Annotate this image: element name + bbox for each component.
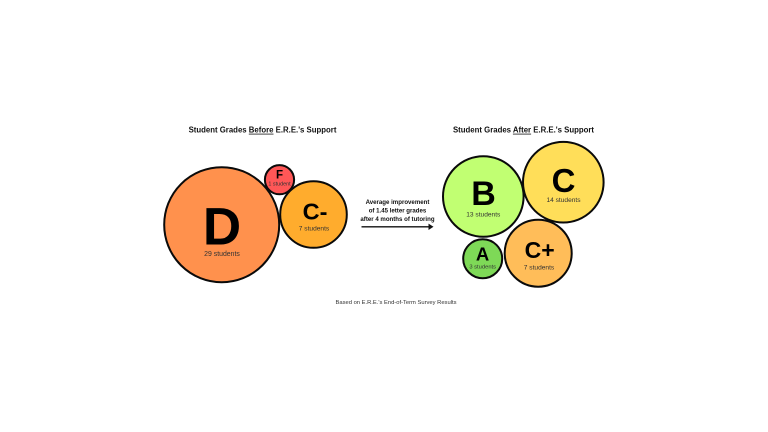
callout: average improvement: after 4 months of tutoring <box>360 216 435 223</box>
panel: grades after support <box>443 142 604 287</box>
bubble: grade D: 29 students <box>204 251 240 258</box>
bubble: grade D <box>164 167 279 282</box>
bubble: grade B: B <box>471 175 496 213</box>
bubble: grade B <box>443 156 524 237</box>
bubble: grade C-: C- <box>303 198 327 224</box>
bubble: grade C+ <box>505 220 572 287</box>
callout: average improvement: of 1.45 letter grades <box>369 208 427 214</box>
bubble: grade D: D <box>203 197 241 256</box>
bubble: grade A: 3 students <box>469 264 496 270</box>
bubble: grade A <box>463 239 502 278</box>
panel: grades before support <box>164 165 347 282</box>
bubble: grade F: F <box>276 170 283 182</box>
bubble: grade C-: 7 students <box>299 226 330 233</box>
bubble: grade F: 1 student <box>268 182 291 188</box>
heading: grades after: Student Grades After E.R.E.'s Support <box>453 126 594 135</box>
footnote: source: Based on E.R.E.'s End-of-Term Survey Results <box>336 300 457 306</box>
bubble: grade C: C <box>552 162 575 199</box>
callout: average improvement <box>360 199 435 223</box>
heading: grades before: Student Grades Before E.R.E.'s Support <box>189 126 337 135</box>
arrow: before to after <box>362 224 434 230</box>
bubble: grade C+: 7 students <box>524 264 555 271</box>
bubble: grade C: 14 students <box>546 197 581 204</box>
bubble: grade A: A <box>476 243 489 264</box>
bubble: grade B: 13 students <box>466 211 501 218</box>
bubble: grade C <box>523 142 604 222</box>
callout: average improvement: Average improvement <box>366 199 429 206</box>
bubble: grade C- <box>280 181 347 248</box>
bubble: grade F <box>265 165 294 194</box>
bubble: grade C+: C+ <box>525 237 555 263</box>
